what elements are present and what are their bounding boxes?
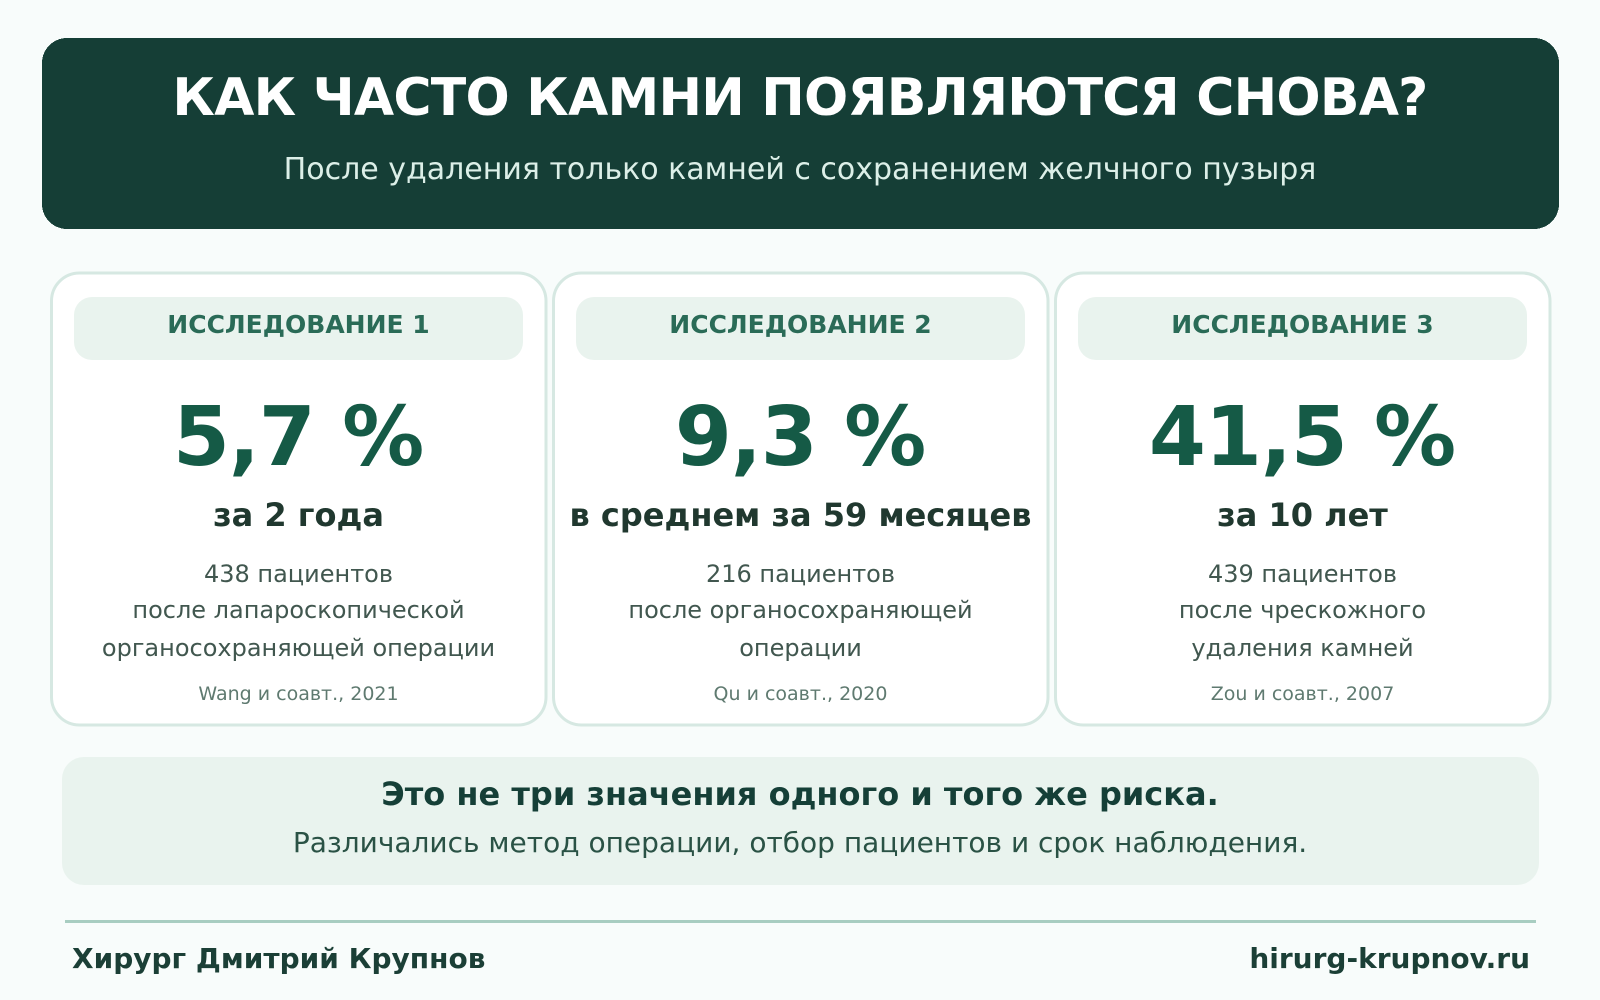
study 1 badge: ИССЛЕДОВАНИЕ 1 <box>167 310 430 339</box>
study 1 badge <box>74 297 523 360</box>
study 3 description <box>1179 560 1426 662</box>
panel: study 3 <box>1056 273 1550 725</box>
study 3 value: 41,5 % <box>1149 390 1455 485</box>
footer website: hirurg-krupnov.ru <box>1249 942 1530 975</box>
study 2 period: в среднем за 59 месяцев <box>570 496 1031 534</box>
footer author: Хирург Дмитрий Крупнов <box>72 942 485 975</box>
study 1 description: 438 пациентов <box>204 560 393 588</box>
study 3 badge: ИССЛЕДОВАНИЕ 3 <box>1171 310 1434 339</box>
study 3 citation: Zou и соавт., 2007 <box>1211 683 1394 705</box>
callout <box>62 757 1539 885</box>
panel: study 1 <box>52 273 546 725</box>
study 1 description: органосохраняющей операции <box>102 634 495 662</box>
callout headline: Это не три значения одного и того же риска. <box>381 775 1219 813</box>
study 1 period: за 2 года <box>213 496 384 534</box>
subtitle: После удаления только камней с сохранением желчного пузыря <box>284 152 1316 187</box>
study 1 citation: Wang и соавт., 2021 <box>198 683 399 705</box>
study 1 value: 5,7 % <box>173 390 423 485</box>
study 3 description: удаления камней <box>1191 634 1414 662</box>
study 3 period: за 10 лет <box>1217 496 1388 534</box>
study 1 description <box>102 560 495 662</box>
study 3 description: после чрескожного <box>1179 596 1426 624</box>
study 2 description: после органосохраняющей <box>628 596 973 624</box>
study 2 badge: ИССЛЕДОВАНИЕ 2 <box>669 310 932 339</box>
study 2 description: операции <box>739 634 862 662</box>
title: КАК ЧАСТО КАМНИ ПОЯВЛЯЮТСЯ СНОВА? <box>172 68 1428 128</box>
callout note: Различались метод операции, отбор пациентов и срок наблюдения. <box>293 826 1307 859</box>
study 3 description: 439 пациентов <box>1208 560 1397 588</box>
study 3 badge <box>1078 297 1527 360</box>
study 2 description: 216 пациентов <box>706 560 895 588</box>
header banner <box>42 38 1559 229</box>
study 2 badge <box>576 297 1025 360</box>
study 2 citation: Qu и соавт., 2020 <box>714 683 887 705</box>
panel: study 2 <box>554 273 1048 725</box>
study 1 description: после лапароскопической <box>132 596 465 624</box>
study 2 description <box>628 560 973 662</box>
study 2 value: 9,3 % <box>675 390 925 485</box>
